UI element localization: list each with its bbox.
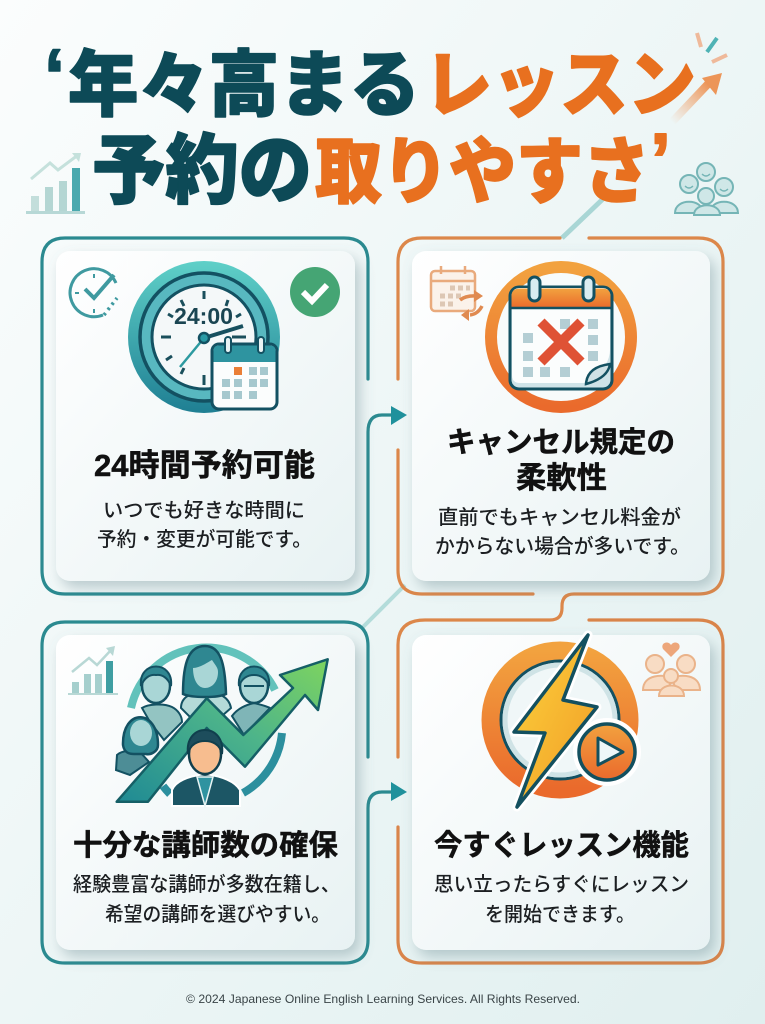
arrow head	[391, 782, 407, 801]
heading: 柔軟性	[516, 462, 607, 495]
body text	[434, 873, 689, 926]
growth arrow	[117, 659, 328, 802]
white card	[412, 251, 710, 581]
title: ’	[650, 118, 671, 203]
connector: title to cancel card	[562, 197, 605, 238]
heading: 24時間予約可能	[94, 448, 315, 483]
white card	[412, 635, 710, 950]
icon: small clock check	[70, 269, 117, 317]
panel frame	[398, 620, 723, 963]
panel: 24-hour booking	[42, 238, 407, 594]
panel: instant lesson	[398, 620, 723, 963]
heading	[447, 426, 675, 495]
body text: を開始できます。	[485, 903, 635, 926]
heading: 今すぐレッスン機能	[434, 829, 689, 862]
body text: いつでも好きな時間に	[103, 499, 305, 522]
icon: clock with calendar	[128, 261, 280, 413]
heading: 十分な講師数の確保	[73, 829, 338, 862]
icon: green check badge	[290, 267, 340, 317]
body text	[73, 873, 340, 926]
body text	[435, 506, 690, 558]
title: レッスン	[424, 46, 696, 126]
panel: cancellation policy	[398, 238, 723, 757]
body text: 思い立ったらすぐにレッスン	[434, 873, 689, 896]
body text: 経験豊富な講師が多数在籍し、	[73, 873, 340, 896]
footer copyright: © 2024 Japanese Online English Learning Services. All Rights Reserved.	[186, 992, 580, 1006]
person: woman left	[116, 751, 149, 775]
icon: rising arrow and sparks	[672, 33, 727, 122]
body text: かからない場合が多いです。	[435, 535, 690, 558]
icon: calendar with red cross	[491, 267, 631, 407]
heading: キャンセル規定の	[447, 426, 675, 459]
title: 予約の	[92, 129, 312, 214]
panel frame	[398, 238, 723, 757]
person: man with glasses	[232, 703, 270, 735]
icon: small growth chart	[68, 646, 118, 695]
icon: clock with calendar: 24:00	[174, 303, 233, 329]
title: 年々高まる	[68, 46, 420, 126]
icon: smiling people	[675, 163, 738, 215]
arrow head	[391, 406, 407, 425]
icon: small calendar with arrows	[431, 266, 483, 321]
body text: 希望の講師を選びやすい。	[105, 903, 330, 926]
white card	[56, 251, 355, 581]
person: man left	[142, 704, 182, 740]
title	[44, 34, 696, 214]
icon: teachers with growth arrow	[116, 646, 328, 806]
person: man front	[172, 774, 240, 806]
person: woman top	[181, 692, 231, 722]
panel frame	[42, 622, 394, 963]
white card	[56, 635, 355, 950]
title: 取りやすさ	[315, 133, 650, 213]
icon: small growth chart	[26, 153, 85, 214]
panel frame	[42, 238, 394, 594]
body text: 直前でもキャンセル料金が	[438, 506, 681, 529]
icon: lightning bolt with play button	[491, 635, 641, 807]
connector: diagonal between cards	[362, 585, 405, 628]
title: ‘	[44, 34, 65, 119]
icon: small people with heart	[643, 642, 700, 696]
panel: enough teachers	[42, 622, 407, 963]
body text: 予約・変更が可能です。	[97, 528, 312, 551]
body text	[97, 499, 312, 551]
